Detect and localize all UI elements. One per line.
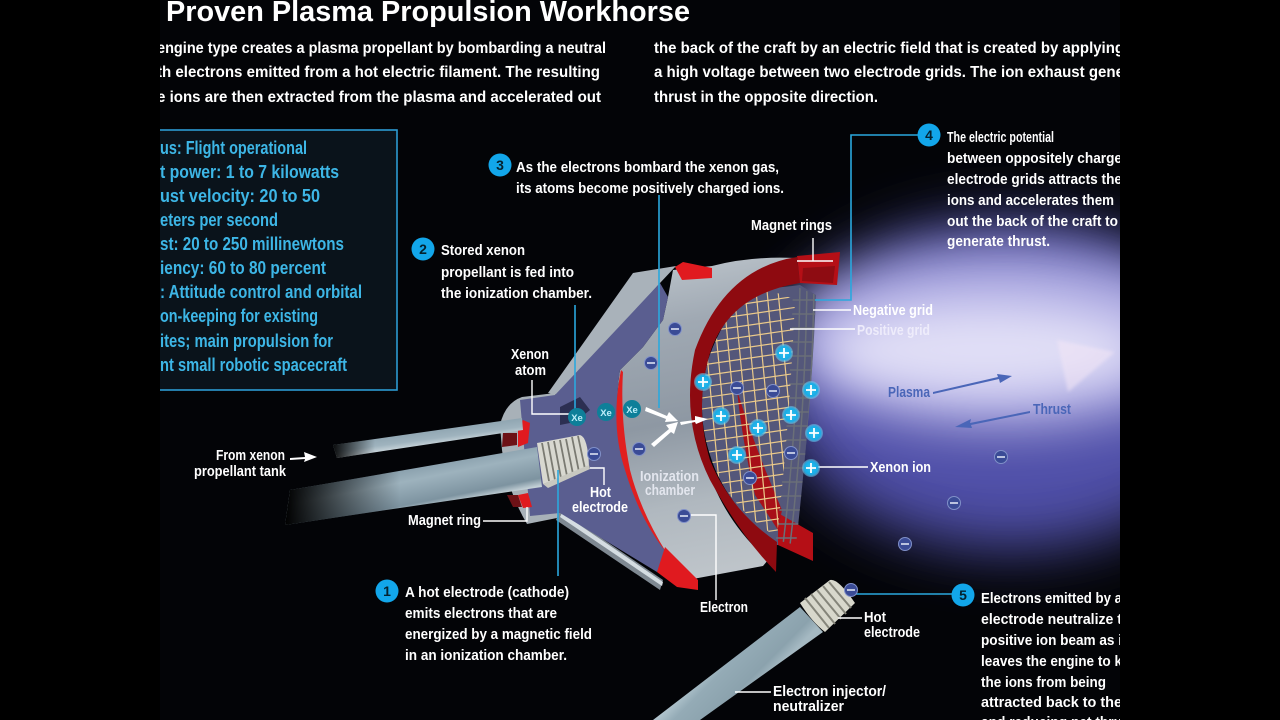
component labels: Ionization bbox=[640, 469, 699, 485]
callout 4 bbox=[918, 124, 1122, 250]
callout 1: in an ionization chamber. bbox=[405, 648, 567, 664]
callout 2: 2 bbox=[419, 241, 427, 257]
component labels: atom bbox=[515, 363, 546, 379]
component labels: electrode bbox=[864, 625, 920, 641]
hot electrode coil bbox=[537, 435, 590, 488]
inner cavity shadow bbox=[560, 397, 590, 425]
intro text right bbox=[654, 40, 1124, 106]
callout 5: the ions from being bbox=[981, 675, 1106, 691]
panel: specifications: ites; main propulsion for bbox=[160, 331, 333, 351]
red showing through grid bbox=[737, 390, 782, 530]
component labels: Thrust bbox=[1033, 402, 1071, 418]
intro text left: e ions are then extracted from the plasma and accelerated out bbox=[157, 89, 602, 106]
rear collar bbox=[500, 393, 562, 524]
rear magnet blocks bbox=[502, 420, 532, 508]
ion plume bbox=[775, 220, 1245, 550]
callout 5: Electrons emitted by a bbox=[981, 591, 1123, 607]
callout 1: energized by a magnetic field bbox=[405, 627, 592, 643]
front grid mesh bbox=[702, 292, 795, 532]
callout 5: positive ion beam as i bbox=[981, 633, 1122, 649]
component labels: Hot bbox=[590, 485, 611, 501]
callout 3: 3 bbox=[496, 157, 504, 173]
panel: specifications: nt small robotic spacecraft bbox=[160, 355, 347, 375]
callout 3 bbox=[488, 154, 784, 197]
component labels: propellant tank bbox=[194, 464, 287, 480]
callout 4: ions and accelerates them bbox=[947, 193, 1114, 209]
intro text right: a high voltage between two electrode grids. The ion exhaust gene bbox=[654, 64, 1124, 81]
callout 2 bbox=[412, 238, 592, 302]
grid backing bbox=[702, 285, 816, 545]
callout 4: electrode grids attracts the bbox=[947, 172, 1122, 188]
panel: specifications: us: Flight operational bbox=[160, 138, 307, 158]
panel: specifications: t power: 1 to 7 kilowatts bbox=[160, 162, 339, 182]
callout 2: Stored xenon bbox=[441, 243, 525, 259]
panel: specifications: ust velocity: 20 to 50 bbox=[160, 186, 320, 206]
upper outer wall bbox=[548, 266, 676, 395]
component labels: Plasma bbox=[888, 385, 931, 401]
callout 5: electrode neutralize t bbox=[981, 612, 1122, 628]
callout 4: between oppositely charge bbox=[947, 151, 1122, 167]
rear ring red bbox=[778, 513, 813, 561]
intro text right: thrust in the opposite direction. bbox=[654, 89, 878, 106]
callout 4: generate thrust. bbox=[947, 234, 1050, 250]
component labels: Hot bbox=[864, 610, 886, 626]
component labels: chamber bbox=[645, 483, 695, 499]
lower outer wall bbox=[556, 510, 663, 590]
callout 5: 5 bbox=[959, 587, 967, 603]
component labels: Positive grid bbox=[857, 323, 930, 339]
top magnet block bbox=[675, 262, 712, 280]
intro text left: th electrons emitted from a hot electric filament. The resulting bbox=[157, 64, 600, 81]
panel: specifications: : Attitude control and orbital bbox=[160, 282, 362, 302]
component labels: Magnet rings bbox=[751, 218, 832, 234]
component labels: electrode bbox=[572, 500, 628, 516]
callout 2: propellant is fed into bbox=[441, 265, 574, 281]
main feed tubes bbox=[285, 418, 542, 525]
callout 1 bbox=[376, 580, 592, 664]
red rim bbox=[690, 257, 800, 572]
component labels: Xenon bbox=[511, 347, 549, 363]
arrow: thrust bbox=[955, 411, 1030, 428]
red inner lip bbox=[616, 370, 666, 552]
panel: specifications: st: 20 to 250 millinewtons bbox=[160, 234, 344, 254]
arrow: from xenon tank bbox=[290, 452, 317, 462]
callout 4: The electric potential bbox=[947, 130, 1054, 146]
white leader lines bbox=[483, 238, 868, 692]
component labels: Negative grid bbox=[853, 303, 933, 319]
callout 3: As the electrons bombard the xenon gas, bbox=[516, 160, 779, 176]
component labels: Magnet ring bbox=[408, 513, 481, 529]
xenon atoms: Xe bbox=[571, 413, 583, 424]
electrons bbox=[588, 322, 1008, 596]
cyan leader lines bbox=[558, 135, 952, 594]
foam insulation bbox=[520, 283, 668, 572]
callout 5: leaves the engine to k bbox=[981, 654, 1123, 670]
callout 1: 1 bbox=[383, 583, 391, 599]
xenon ions bbox=[694, 344, 823, 477]
callout 1: A hot electrode (cathode) bbox=[405, 585, 569, 601]
callout 1: emits electrons that are bbox=[405, 606, 557, 622]
xenon atoms: Xe bbox=[600, 408, 612, 419]
intro text left bbox=[157, 40, 606, 106]
callout 4: 4 bbox=[925, 127, 933, 143]
xenon atoms: Xe bbox=[626, 405, 638, 416]
callout 5: attracted back to the bbox=[981, 695, 1122, 711]
panel: specifications bbox=[160, 129, 398, 391]
panel: specifications: on-keeping for existing bbox=[160, 306, 318, 326]
callout 3: its atoms become positively charged ions. bbox=[516, 181, 784, 197]
chamber interior bbox=[617, 258, 795, 581]
component labels: Electron bbox=[700, 600, 748, 616]
component labels: neutralizer bbox=[773, 699, 844, 715]
panel: specifications: iency: 60 to 80 percent bbox=[160, 258, 326, 278]
panel: specifications: eters per second bbox=[160, 210, 278, 230]
arrow: plasma bbox=[933, 374, 1012, 394]
intro text right: the back of the craft by an electric field that is created by applying bbox=[654, 40, 1124, 57]
neutralizer tube bbox=[653, 580, 855, 720]
xenon atoms bbox=[568, 400, 641, 426]
callout 4: out the back of the craft to bbox=[947, 214, 1118, 230]
arrows: electrons and atoms collide bbox=[645, 407, 708, 447]
component labels: From xenon bbox=[216, 448, 285, 464]
component labels: Electron injector/ bbox=[773, 684, 886, 700]
thruster body bbox=[500, 252, 840, 590]
intro text left: engine type creates a plasma propellant by bombarding a neutral bbox=[157, 40, 606, 57]
bottom magnet block bbox=[657, 547, 698, 590]
callout 5 bbox=[952, 584, 1123, 720]
rear grid mesh bbox=[776, 288, 816, 544]
top rear ring bbox=[797, 252, 840, 285]
component labels: Xenon ion bbox=[870, 460, 931, 476]
callout 2: the ionization chamber. bbox=[441, 286, 592, 302]
component labels bbox=[194, 218, 1071, 715]
